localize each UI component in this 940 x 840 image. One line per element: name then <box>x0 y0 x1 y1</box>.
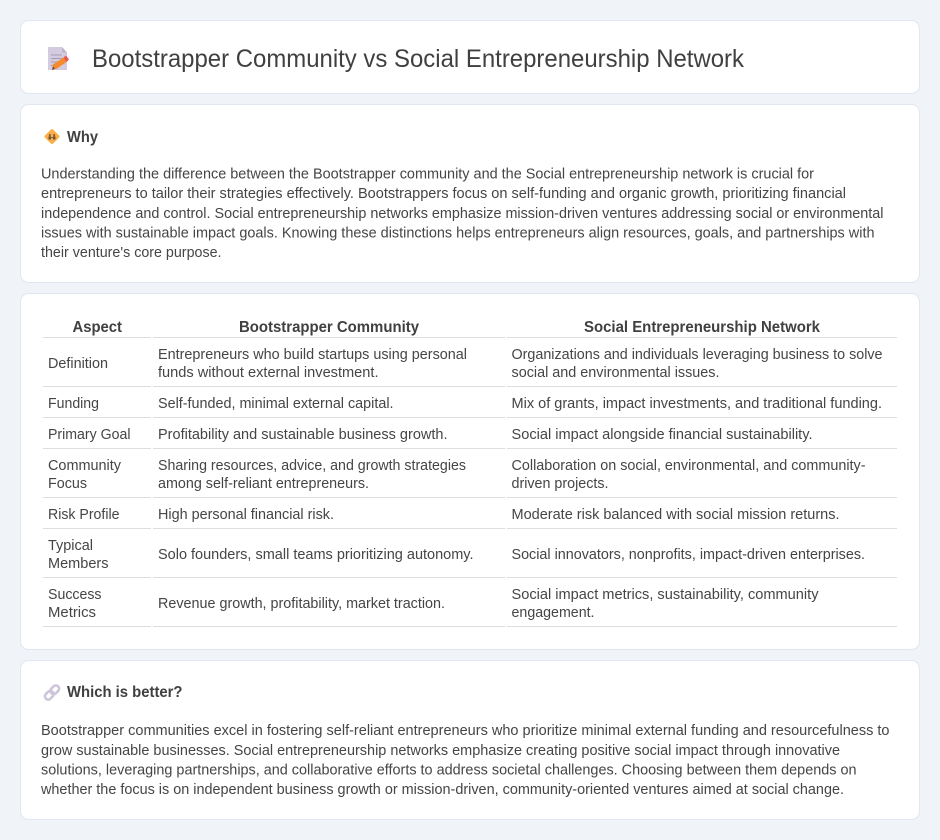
text block: why paragraph: issues with sustainable impact goals. Knowing these distinctions helps entrepreneurs align resources, goals, and partnerships with <box>41 226 874 242</box>
row: funding <box>43 396 897 418</box>
table header: Bootstrapper Community <box>239 319 419 336</box>
table header: Aspect <box>72 319 123 336</box>
text block: why paragraph: their venture's core purpose. <box>41 245 222 261</box>
icon: warning diamond <box>44 128 60 145</box>
row: primary goal: Profitability and sustainable business growth. <box>158 427 448 443</box>
row: typical members: Solo founders, small teams prioritizing autonomy. <box>158 547 474 563</box>
row: community focus <box>43 458 897 498</box>
text block: why paragraph: entrepreneurs to tailor their strategies effectively. Bootstrappers focus on self-funding and organic growth, prioritizing financial <box>41 186 846 202</box>
icon: document with pencil <box>48 47 69 70</box>
text block: which is better paragraph <box>40 723 890 798</box>
row: typical members: Typical <box>48 538 93 554</box>
panel: header <box>20 20 920 94</box>
row: typical members <box>43 538 897 578</box>
row: success metrics: engagement. <box>512 605 594 621</box>
row: typical members: Social innovators, nonprofits, impact-driven enterprises. <box>512 547 865 563</box>
row: community focus: driven projects. <box>512 476 608 492</box>
row: definition: Entrepreneurs who build startups using personal <box>158 347 467 363</box>
text block: which is better paragraph: solutions, leveraging partnerships, and collaborative efforts to address societal challenges. Choosing between them depends on <box>41 762 856 778</box>
row: risk profile: High personal financial risk. <box>158 507 334 523</box>
row: community focus: among self-reliant entrepreneurs. <box>158 476 369 492</box>
row: community focus: Focus <box>48 476 87 492</box>
row: success metrics: Revenue growth, profitability, market traction. <box>158 596 445 612</box>
table header: Social Entrepreneurship Network <box>584 319 820 336</box>
row: definition <box>43 347 897 387</box>
text block: which is better paragraph: grow sustainable businesses. Social entrepreneurship networks emphasize creating positive social impact through innovative <box>41 743 840 759</box>
row: community focus: Sharing resources, advice, and growth strategies <box>158 458 466 474</box>
row: risk profile <box>43 507 897 529</box>
row: primary goal: Social impact alongside financial sustainability. <box>512 427 812 443</box>
row: definition: social and environmental issues. <box>512 365 720 381</box>
row: success metrics: Social impact metrics, sustainability, community <box>512 587 819 603</box>
text block: why paragraph <box>41 166 884 261</box>
row: primary goal <box>43 427 897 449</box>
row: definition: Organizations and individuals leveraging business to solve <box>512 347 882 363</box>
heading: which is better: Which is better? <box>67 684 182 701</box>
row: success metrics: Metrics <box>48 605 96 621</box>
row: success metrics <box>43 587 897 627</box>
text block: which is better paragraph: Bootstrapper communities excel in fostering self-reliant entrepreneurs who prioritize minimal external funding and resourcefulness to <box>41 723 890 739</box>
row: funding: Funding <box>48 396 99 412</box>
panel: which is better <box>20 660 920 820</box>
row: risk profile: Risk Profile <box>48 507 120 523</box>
row: success metrics: Success <box>48 587 102 603</box>
text block: why paragraph: independence and control. Social entrepreneurship networks emphasize mission-driven ventures addressing social or environmental <box>41 206 884 222</box>
table header <box>43 319 897 338</box>
row: risk profile: Moderate risk balanced with social mission returns. <box>512 507 840 523</box>
row: definition: funds without external investment. <box>158 365 378 381</box>
heading: why: Why <box>67 129 98 146</box>
row: community focus: Collaboration on social, environmental, and community- <box>512 458 866 474</box>
text block: why paragraph: Understanding the difference between the Bootstrapper community and the Social entrepreneurship network is crucial for <box>41 166 814 182</box>
panel: comparison table <box>20 294 920 650</box>
row: primary goal: Primary Goal <box>48 427 130 443</box>
row: funding: Mix of grants, impact investments, and traditional funding. <box>512 396 882 412</box>
row: typical members: Members <box>48 556 108 572</box>
row: community focus: Community <box>48 458 122 474</box>
panel: why <box>20 104 920 282</box>
text block: which is better paragraph: whether the focus is on independent business growth or mission-driven, community-oriented ventures aimed at social change. <box>40 782 844 798</box>
icon: chain link <box>44 684 60 701</box>
title: Bootstrapper Community vs Social Entrepreneurship Network <box>92 45 744 73</box>
row: definition: Definition <box>48 356 108 372</box>
row: funding: Self-funded, minimal external capital. <box>158 396 394 412</box>
